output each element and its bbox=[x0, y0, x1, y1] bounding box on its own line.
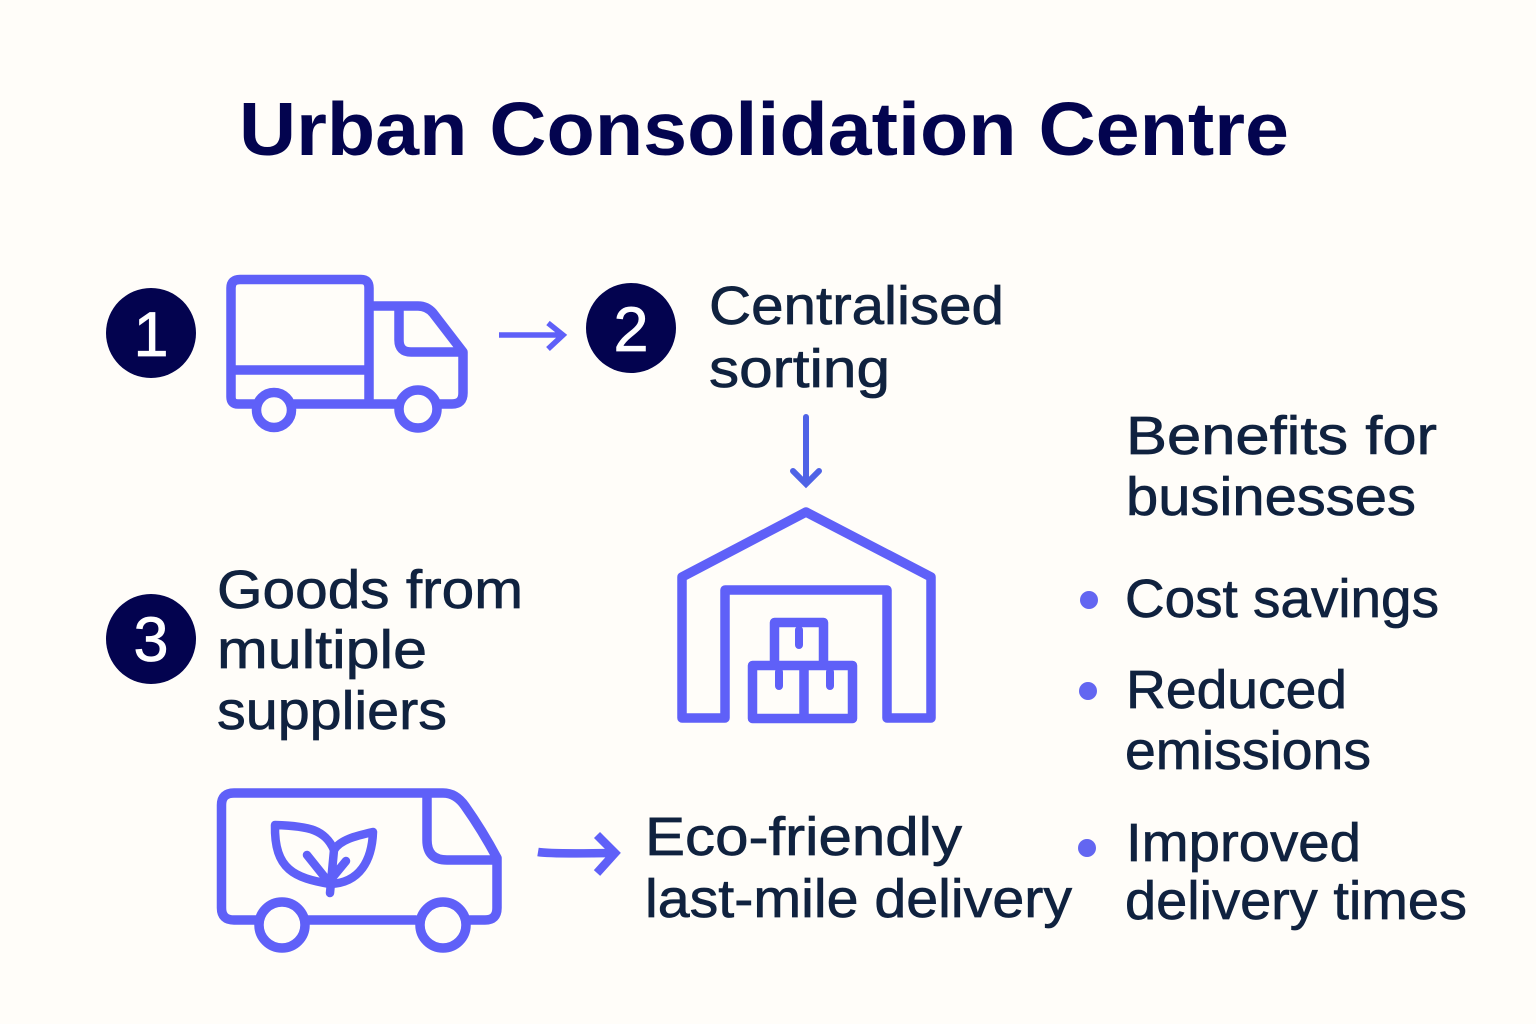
text: goods from multiple suppliers: multiple bbox=[217, 620, 427, 680]
step 3 number badge: 3 bbox=[133, 605, 169, 675]
icon: leaf bbox=[275, 825, 373, 893]
arrow: van to last-mile text bbox=[538, 835, 615, 873]
heading: benefits for businesses: Benefits for bbox=[1126, 406, 1437, 466]
text: eco-friendly last-mile delivery: Eco-friendly bbox=[645, 807, 962, 867]
benefit: reduced emissions: Reduced bbox=[1126, 660, 1347, 720]
benefit: cost savings: Cost savings bbox=[1125, 569, 1439, 629]
text: goods from multiple suppliers bbox=[217, 560, 523, 741]
benefit: reduced emissions: emissions bbox=[1125, 721, 1371, 781]
step 2 number badge: 2 bbox=[613, 295, 649, 365]
arrow: truck to sorting bbox=[499, 323, 563, 349]
heading: benefits for businesses: businesses bbox=[1126, 467, 1416, 527]
icon: warehouse with boxes bbox=[682, 512, 931, 718]
text: centralised sorting bbox=[709, 276, 1004, 399]
text: centralised sorting: Centralised bbox=[709, 276, 1004, 336]
icon: delivery truck bbox=[231, 280, 463, 428]
benefit: improved delivery times: delivery times bbox=[1125, 871, 1467, 931]
title: Urban Consolidation Centre bbox=[239, 87, 1289, 171]
benefit: improved delivery times: Improved bbox=[1126, 813, 1361, 873]
step 3 number badge bbox=[106, 594, 196, 684]
step 1 number badge: 1 bbox=[133, 300, 169, 370]
text: eco-friendly last-mile delivery bbox=[645, 807, 1072, 929]
heading: benefits for businesses bbox=[1126, 406, 1437, 527]
step 1 number badge bbox=[106, 288, 196, 378]
benefit: improved delivery times bbox=[1078, 813, 1467, 931]
arrow: sorting to warehouse bbox=[793, 417, 819, 484]
step 2 number badge bbox=[586, 283, 676, 373]
icon: eco delivery van bbox=[222, 793, 497, 948]
benefit: reduced emissions bbox=[1079, 660, 1371, 781]
text: goods from multiple suppliers: suppliers bbox=[217, 681, 447, 741]
text: centralised sorting: sorting bbox=[709, 339, 890, 399]
text: eco-friendly last-mile delivery: last-mile delivery bbox=[645, 869, 1072, 929]
text: goods from multiple suppliers: Goods from bbox=[217, 560, 523, 620]
